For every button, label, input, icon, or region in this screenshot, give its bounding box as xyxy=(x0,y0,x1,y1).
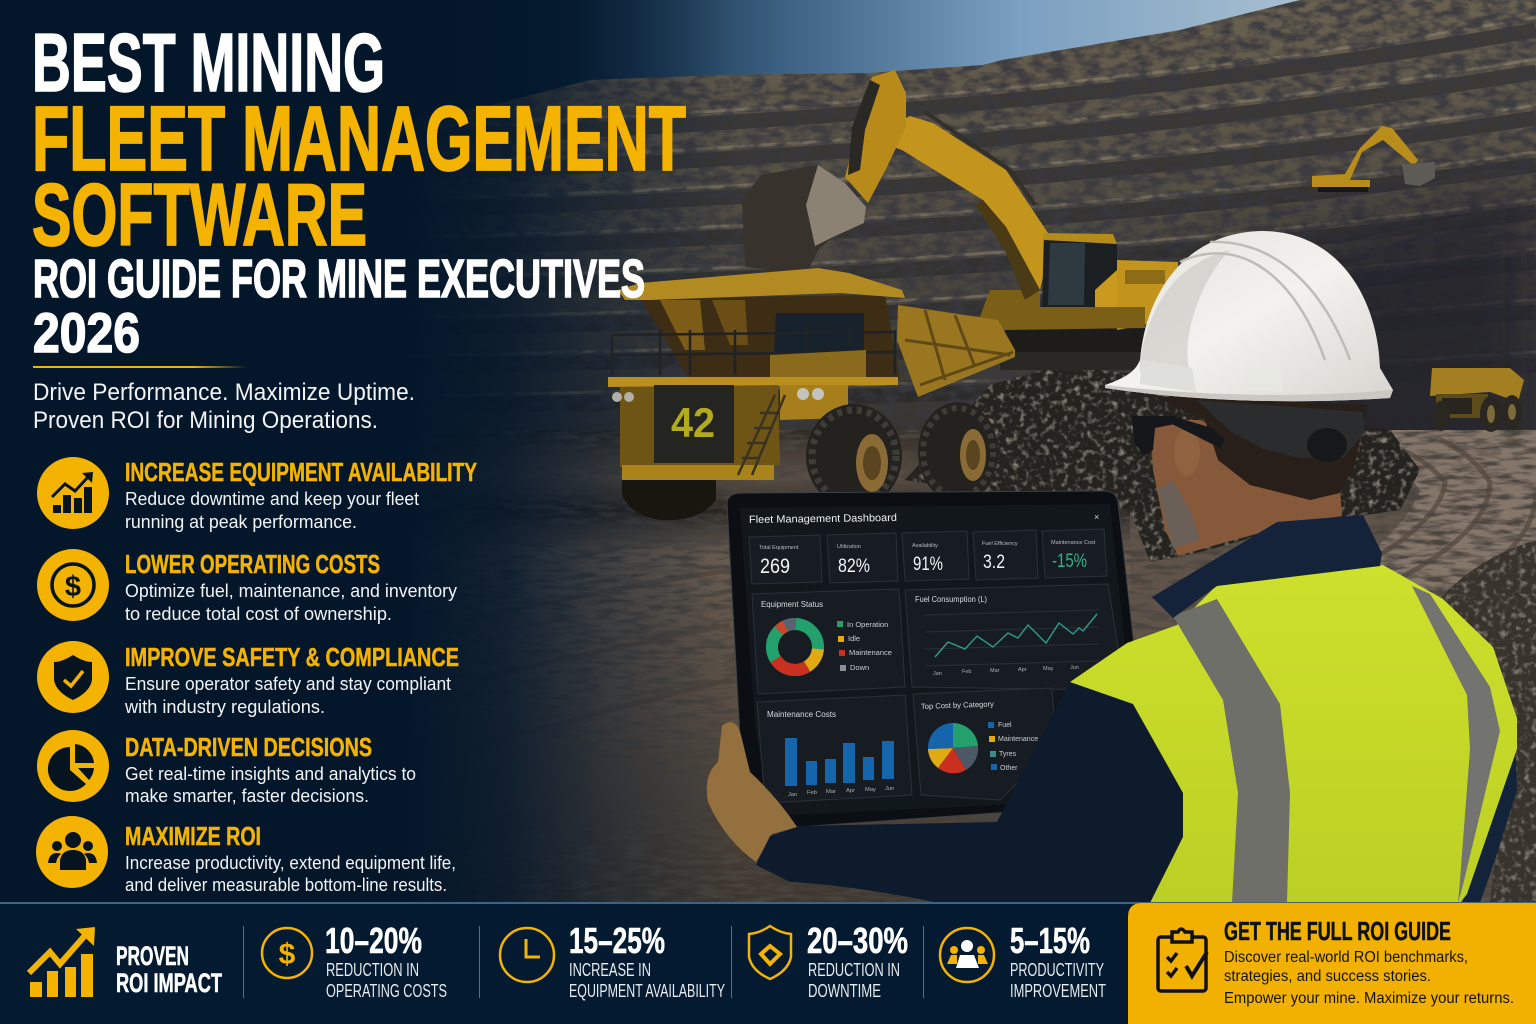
donut legend: Down xyxy=(850,663,869,672)
benefit: data-driven decisions: Get real-time insights and analytics to xyxy=(125,764,416,784)
bucket xyxy=(742,165,866,273)
icon: clipboard checklist xyxy=(1158,929,1207,991)
proven ROI label xyxy=(116,941,222,998)
donut legend: Idle xyxy=(848,634,860,643)
heading: main title: BEST MINING xyxy=(32,16,385,109)
stat: productivity: PRODUCTIVITY xyxy=(1010,960,1104,980)
benefit: improve safety and compliance: IMPROVE SAFETY & COMPLIANCE xyxy=(125,642,459,672)
donut legend: Maintenance xyxy=(849,648,892,657)
heading: main title xyxy=(32,16,686,364)
panel: equipment status xyxy=(752,589,905,694)
KPI: total equipment: 269 xyxy=(760,555,790,578)
heading: main title: ROI GUIDE FOR MINE EXECUTIVES xyxy=(33,249,645,309)
benefit: maximize ROI xyxy=(36,816,456,895)
heading: main title: FLEET MANAGEMENT xyxy=(32,88,686,190)
stat: operating costs xyxy=(262,920,447,1001)
benefit: lower operating costs: to reduce total cost of ownership. xyxy=(125,604,392,624)
tagline xyxy=(33,379,415,434)
benefit: maximize ROI: Increase productivity, extend equipment life, xyxy=(125,853,456,873)
rear wheel xyxy=(918,402,998,502)
stat: equipment availability xyxy=(500,920,725,1001)
icon: chart with arrow xyxy=(37,457,109,529)
panel: maintenance costs bar chart xyxy=(757,695,912,803)
right rock pile foreground xyxy=(1440,540,1536,902)
KPI: availability: Availability xyxy=(912,543,938,549)
stat: equipment availability: 15–25% xyxy=(569,920,665,961)
tagline: Proven ROI for Mining Operations. xyxy=(33,407,378,434)
hard hat suspension band xyxy=(1197,400,1365,458)
distant excavator xyxy=(1312,126,1435,192)
stat: operating costs: OPERATING COSTS xyxy=(326,981,447,1001)
panel: top cost by category pie chart: Maintenance xyxy=(998,736,1038,743)
cab body xyxy=(770,350,866,378)
panel: get the full ROI guide call to action: strategies, and success stories. xyxy=(1224,968,1431,985)
KPI: total equipment xyxy=(749,535,822,584)
panel: fuel consumption line chart xyxy=(905,584,1120,690)
benefit: lower operating costs xyxy=(37,549,457,624)
sky xyxy=(300,0,1536,130)
rock pile xyxy=(900,365,1430,565)
close button: × xyxy=(1094,512,1099,522)
panel: get the full ROI guide call to action: Discover real-world ROI benchmarks, xyxy=(1224,949,1468,966)
benefit: increase equipment availability: running at peak performance. xyxy=(125,512,357,532)
panel: fuel consumption line chart: May xyxy=(1043,666,1054,672)
donut chart xyxy=(762,614,828,680)
donut legend xyxy=(837,620,892,672)
canopy underside xyxy=(640,295,900,380)
radiator xyxy=(654,385,734,463)
icon: dollar coin xyxy=(37,549,109,621)
panel: fuel consumption line chart: Mar xyxy=(990,668,1000,674)
KPI: maintenance cost xyxy=(1042,529,1107,578)
benefit: increase equipment availability xyxy=(37,457,477,532)
ground and haul road xyxy=(446,430,1536,902)
heading: main title: SOFTWARE xyxy=(32,165,367,264)
boom xyxy=(888,116,1048,290)
haul truck number 42 xyxy=(608,268,1015,520)
hi-vis vest xyxy=(1070,565,1517,903)
panel: equipment status: Equipment Status xyxy=(761,600,823,609)
icon: shield xyxy=(749,926,791,979)
KPI: availability: 91% xyxy=(913,554,943,575)
KPI: fuel efficiency xyxy=(973,530,1038,580)
benefit: increase equipment availability: Reduce downtime and keep your fleet xyxy=(125,489,419,509)
panel: fuel consumption line chart: Jan xyxy=(933,671,942,677)
KPI: utilization: 82% xyxy=(838,556,870,577)
stat: downtime: 20–30% xyxy=(807,920,908,961)
canopy xyxy=(618,268,905,300)
icon: dollar ring xyxy=(262,928,312,978)
panel: fuel consumption line chart: Jun xyxy=(1070,665,1079,671)
benefit: improve safety and compliance: with industry regulations. xyxy=(124,697,325,717)
benefit: lower operating costs: LOWER OPERATING COSTS xyxy=(125,549,380,579)
cab window xyxy=(774,313,864,355)
excavator xyxy=(742,70,1195,370)
front wheel xyxy=(806,404,902,508)
icon: dollar coin: $ xyxy=(65,571,81,603)
benefit: improve safety and compliance xyxy=(37,641,459,717)
stat: productivity: IMPROVEMENT xyxy=(1010,981,1106,1001)
KPI: maintenance cost: -15% xyxy=(1052,551,1087,572)
stat: downtime: REDUCTION IN xyxy=(808,960,900,980)
tracks xyxy=(1005,328,1195,352)
KPI: total equipment: Total Equipment xyxy=(759,545,799,551)
panel: maintenance costs bar chart: Mar xyxy=(826,789,836,795)
panel: maintenance costs bar chart: Jan xyxy=(788,792,797,798)
collar xyxy=(1152,515,1382,618)
cab xyxy=(1042,233,1117,307)
truck number: 42 xyxy=(671,399,715,446)
donut legend: In Operation xyxy=(847,620,888,629)
proven ROI label: ROI IMPACT xyxy=(116,968,222,998)
worker hand holding tablet xyxy=(707,722,797,862)
worker xyxy=(756,231,1517,903)
benefit: data-driven decisions xyxy=(37,730,416,806)
panel: top cost by category pie chart: Tyres xyxy=(999,751,1017,758)
panel: fuel consumption line chart: Feb xyxy=(962,669,971,675)
benefit: data-driven decisions: make smarter, faster decisions. xyxy=(125,786,369,806)
panel: proven ROI impact bar xyxy=(0,902,1536,1024)
stat: equipment availability: INCREASE IN xyxy=(569,960,651,980)
benefit: increase equipment availability: INCREASE EQUIPMENT AVAILABILITY xyxy=(125,457,477,487)
proven ROI label: PROVEN xyxy=(116,941,189,971)
excavator body xyxy=(1117,260,1178,330)
left reflective stripe xyxy=(1173,599,1290,903)
far front wheel xyxy=(622,470,716,520)
bumper xyxy=(622,465,774,480)
benefit: maximize ROI: MAXIMIZE ROI xyxy=(125,821,261,851)
panel: top cost by category pie chart: Top Cost by Category xyxy=(921,699,994,711)
panel: maintenance costs bar chart: Jun xyxy=(885,786,894,792)
railings xyxy=(612,325,895,375)
deck xyxy=(608,377,898,387)
panel: top cost by category pie chart: Fuel xyxy=(998,722,1012,729)
benefit: improve safety and compliance: Ensure operator safety and stay compliant xyxy=(125,674,451,694)
stat: downtime xyxy=(749,920,908,1001)
panel: top cost by category pie chart xyxy=(913,688,1056,800)
panel: get the full ROI guide call to action xyxy=(1128,903,1536,1024)
stat: productivity: 5–15% xyxy=(1010,920,1090,961)
panel: maintenance costs bar chart: Apr xyxy=(846,788,855,794)
KPI: utilization: Utilization xyxy=(837,544,861,550)
icon: dollar ring: $ xyxy=(279,938,296,971)
stat: operating costs: 10–20% xyxy=(325,920,422,961)
panel: fuel consumption line chart: Fuel Consumption (L) xyxy=(915,595,987,604)
tablet dashboard xyxy=(727,491,1140,827)
icon: pie chart xyxy=(37,730,109,802)
headlights xyxy=(797,388,809,400)
KPI: availability xyxy=(902,531,969,581)
distant haul truck xyxy=(1430,368,1524,432)
right reflective stripe xyxy=(1412,586,1500,903)
arm xyxy=(845,70,906,203)
ear xyxy=(1174,428,1200,476)
panel: maintenance costs bar chart: May xyxy=(865,787,876,793)
benefit: data-driven decisions: DATA-DRIVEN DECISIONS xyxy=(125,732,372,762)
benefit: maximize ROI: and deliver measurable bottom-line results. xyxy=(125,875,447,895)
icon: people group xyxy=(36,816,108,888)
sunglasses xyxy=(1132,416,1225,456)
panel: top cost by category pie chart: Other xyxy=(1000,765,1018,772)
icon: clock xyxy=(500,928,554,982)
stat: downtime: DOWNTIME xyxy=(808,981,881,1001)
neck and face xyxy=(1150,420,1342,556)
KPI: utilization xyxy=(827,533,898,583)
KPI: fuel efficiency: Fuel Efficiency xyxy=(982,541,1018,547)
stat: equipment availability: EQUIPMENT AVAILABILITY xyxy=(569,981,725,1001)
dump bed xyxy=(897,305,1015,397)
panel: fuel consumption line chart: Apr xyxy=(1018,667,1027,673)
hard hat xyxy=(1105,231,1393,401)
background: mine photo scene xyxy=(446,0,1536,902)
icon: shield with check xyxy=(37,641,109,713)
stat: operating costs: REDUCTION IN xyxy=(326,960,419,980)
dashboard title: Fleet Management Dashboard xyxy=(749,512,897,526)
KPI: fuel efficiency: 3.2 xyxy=(983,552,1005,573)
heading: main title: 2026 xyxy=(33,301,140,364)
terraced pit wall xyxy=(446,0,1536,430)
right side ground xyxy=(1130,483,1494,902)
icon: team ring xyxy=(940,928,994,982)
stairs xyxy=(738,395,785,475)
hair xyxy=(1152,396,1367,500)
chassis xyxy=(620,385,780,467)
tablet frame xyxy=(727,491,1140,827)
jacket and sleeve xyxy=(756,640,1240,903)
benefit: lower operating costs: Optimize fuel, maintenance, and inventory xyxy=(125,581,457,601)
screen xyxy=(740,504,1130,816)
panel: get the full ROI guide call to action: Empower your mine. Maximize your returns. xyxy=(1224,990,1514,1007)
icon: growth chart xyxy=(29,927,95,997)
panel: maintenance costs bar chart: Maintenance Costs xyxy=(767,710,836,719)
panel: maintenance costs bar chart: Feb xyxy=(807,790,817,796)
KPI: maintenance cost: Maintenance Cost xyxy=(1051,540,1096,546)
tagline: Drive Performance. Maximize Uptime. xyxy=(33,379,415,406)
stat: productivity xyxy=(940,920,1106,1001)
